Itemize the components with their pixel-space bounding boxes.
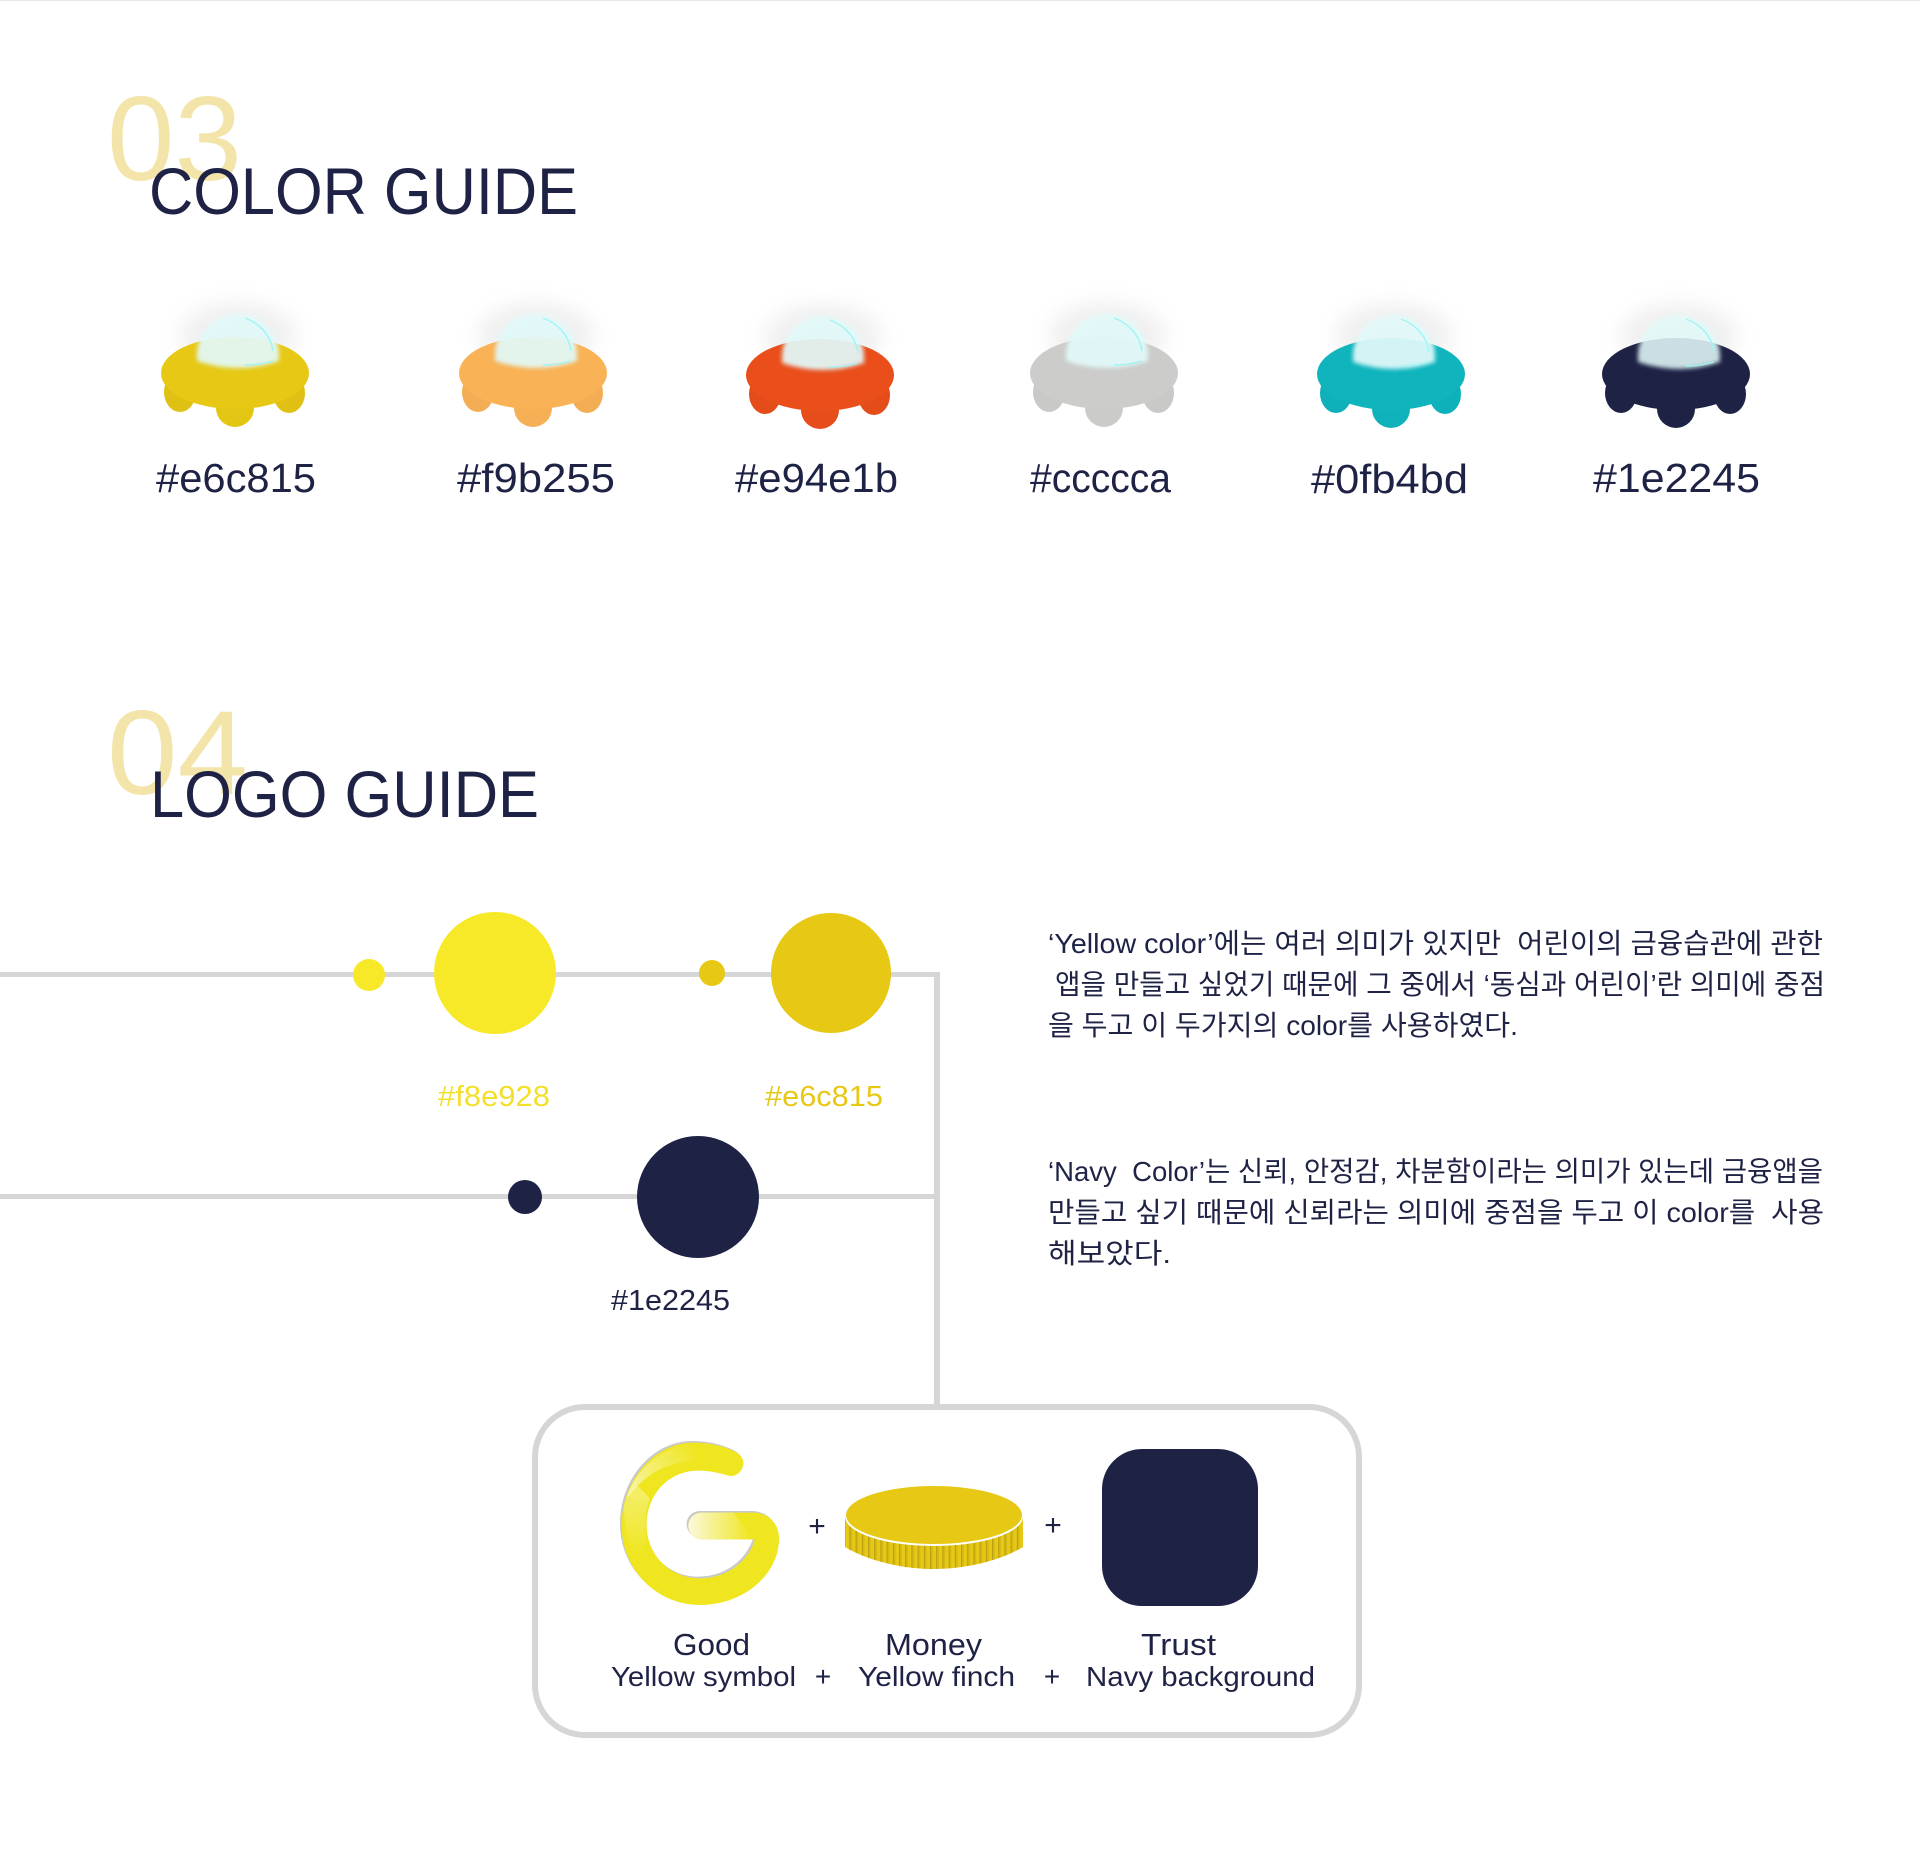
swatch icon: navy ufo [1602,304,1750,428]
plus sign: + [808,1510,826,1543]
plus sign: + [1044,1661,1060,1692]
label: good: Good [673,1627,750,1662]
hex label: f9b255: #f9b255 [457,455,615,501]
text block: navy color meaning: ‘Navy Color’는 신뢰, 안정감, 차분함이라는 의미가 있는데 금융앱을 [1048,1156,1823,1187]
text block: yellow color meaning: 앱을 만들고 싶었기 때문에 그 중에서 ‘동심과 어린이’란 의미에 중점 [1055,969,1825,1000]
text block: yellow color meaning: 을 두고 이 두가지의 color를 사용하였다. [1048,1010,1518,1041]
label: navy background: Navy background [1086,1661,1315,1692]
icon: gold coin [845,1486,1023,1569]
section number 03: 03 [107,72,242,206]
hex label: cccccca: #ccccca [1030,455,1171,501]
section number 04: 04 [107,686,248,820]
heading: logo guide: LOGO GUIDE [150,757,539,831]
plus sign: + [815,1661,831,1692]
icon: navy background square [1102,1449,1258,1606]
hex label: 0fb4bd: #0fb4bd [1311,456,1468,502]
label: money: Money [885,1627,983,1662]
label: yellow symbol: Yellow symbol [611,1661,796,1692]
icon: yellow G symbol [620,1441,779,1605]
swatch icon: orange ufo [459,303,607,427]
text block: navy color meaning: 해보았다. [1048,1238,1171,1269]
hex label: 1e2245: #1e2245 [1593,455,1760,501]
color dots: navy [508,1136,759,1258]
text block: yellow color meaning [1048,928,1825,1041]
swatch icon: teal ufo [1317,304,1465,428]
plus sign: + [1044,1509,1062,1542]
swatch icon: gray ufo [1030,303,1178,427]
label: e6c815: #e6c815 [765,1081,883,1113]
heading: color guide: COLOR GUIDE [149,154,578,228]
hex label: e94e1b: #e94e1b [735,455,898,501]
text block: navy color meaning: 만들고 싶기 때문에 신뢰라는 의미에 중점을 두고 이 color를 사용 [1048,1197,1824,1228]
hex label: e6c815: #e6c815 [156,455,316,501]
color dots: gold [699,913,891,1033]
text block: navy color meaning [1048,1156,1824,1269]
label: 1e2245: #1e2245 [611,1285,730,1317]
label: f8e928: #f8e928 [438,1081,550,1113]
color dots: yellow [353,912,556,1034]
swatch icon: yellow ufo [161,303,309,427]
color swatches row [156,303,1760,502]
panel: logo composition [535,1407,1359,1735]
text block: yellow color meaning: ‘Yellow color’에는 여러 의미가 있지만 어린이의 금융습관에 관한 [1048,928,1823,959]
connector lines [0,972,940,1408]
label: yellow finch: Yellow finch [858,1661,1015,1692]
swatch icon: red-orange ufo [746,305,894,429]
label: trust: Trust [1141,1627,1216,1662]
